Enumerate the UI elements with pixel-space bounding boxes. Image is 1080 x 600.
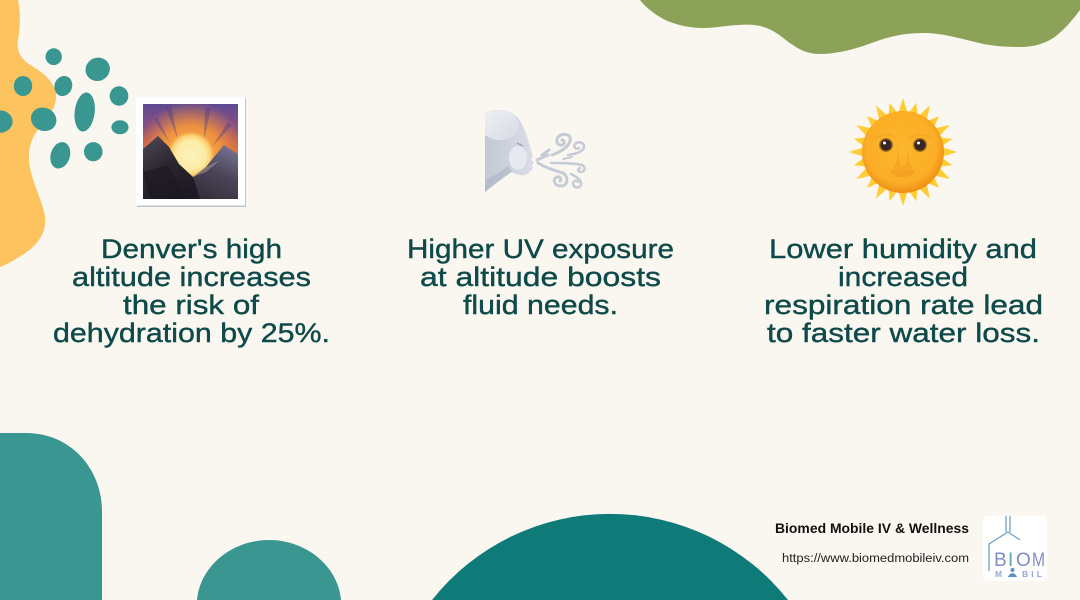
- text: altitude risk: dehydration by 25%.: [53, 318, 330, 348]
- logo figure: [1008, 568, 1017, 577]
- text: humidity and respiration: respiration rate lead: [764, 290, 1043, 320]
- text: UV exposure: [407, 234, 674, 320]
- brow shading: [875, 135, 931, 140]
- logo: [983, 516, 1047, 581]
- decorative shape: teal arch bottom left: [0, 433, 102, 600]
- left eye: [879, 138, 893, 152]
- text: humidity and respiration: Lower humidity and: [769, 234, 1037, 264]
- text: altitude risk: the risk of: [123, 290, 260, 320]
- breath swirls: [537, 134, 585, 187]
- logo wordmark: [994, 550, 1045, 571]
- icon: sun with face: [849, 98, 957, 206]
- decorative dots: [0, 48, 129, 171]
- hair lobe: [485, 110, 519, 140]
- decorative shape: dark teal mound bottom: [432, 514, 788, 600]
- text: humidity and respiration: increased: [838, 262, 968, 292]
- icon: sunrise over mountains: [136, 97, 246, 207]
- text: altitude risk: Denver's high: [101, 234, 282, 264]
- logo wordmark: O: [1016, 550, 1031, 571]
- logo wordmark: M: [1032, 550, 1045, 571]
- nose shading: [894, 140, 912, 173]
- neck shadow: [485, 166, 512, 192]
- text: UV exposure: fluid needs.: [463, 290, 618, 320]
- text: UV exposure: Higher UV exposure: [407, 234, 674, 264]
- text: humidity and respiration: to faster water loss.: [767, 318, 1040, 348]
- decorative shape: teal semicircle bottom: [197, 540, 341, 600]
- icon: wind blowing face: [485, 110, 585, 192]
- footer: company name: Biomed Mobile IV & Wellness: [775, 521, 969, 536]
- cheek highlight: [509, 146, 527, 170]
- logo sub wordmark start: M: [995, 569, 1002, 579]
- logo sub wordmark end: BIL: [1022, 569, 1042, 579]
- decorative blob: yellow left: [0, 0, 56, 267]
- sun rays: [849, 98, 957, 206]
- eyelid: [517, 143, 523, 146]
- text: altitude risk: [53, 234, 330, 348]
- logo house outline: [989, 516, 1020, 571]
- footer: website: https://www.biomedmobileiv.com: [782, 553, 969, 565]
- head silhouette: [485, 110, 534, 192]
- logo wordmark: B: [994, 550, 1007, 571]
- decorative blob: green top right: [640, 0, 1080, 54]
- logo wordmark: I: [1008, 550, 1013, 571]
- mouth: [890, 169, 916, 177]
- text: altitude risk: altitude increases: [72, 262, 311, 292]
- text: humidity and respiration: [764, 234, 1043, 348]
- right eye: [913, 138, 927, 152]
- text: UV exposure: at altitude boosts: [420, 262, 661, 292]
